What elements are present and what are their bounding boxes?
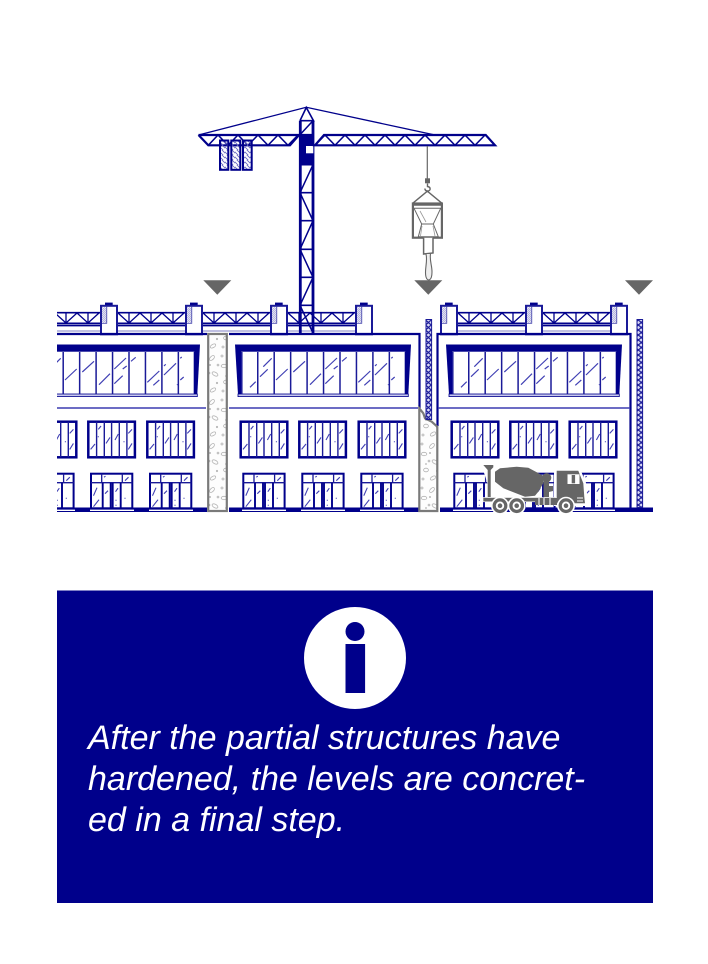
roof piers (101, 303, 627, 334)
arrow: left joint (203, 280, 231, 295)
tower crane (198, 107, 495, 333)
building facade row (24, 303, 653, 512)
mixer chute (483, 465, 493, 497)
hook block (425, 178, 430, 191)
upper band windows (24, 344, 622, 397)
truck chassis (483, 498, 557, 505)
bucket body (413, 204, 442, 238)
wall outlines (57, 334, 630, 508)
truck cab (557, 471, 585, 503)
crane mast (299, 108, 314, 333)
mixer drum (495, 467, 543, 497)
panel: info (57, 590, 653, 903)
ground line (57, 508, 653, 512)
truck wheels (491, 497, 575, 515)
crane jib (315, 135, 495, 145)
crane counter-jib (198, 135, 299, 145)
drum drive (542, 473, 553, 497)
arrow: right joint (625, 280, 653, 295)
info text: ed in a final step. (88, 801, 345, 839)
icon: information (304, 607, 406, 709)
concrete column: being poured (419, 408, 437, 511)
arrow: middle joint (414, 280, 442, 295)
formwork lattice: right joint (637, 320, 643, 508)
floor lines (57, 407, 630, 409)
concrete column: finished (208, 334, 227, 511)
hoist cable (426, 146, 428, 179)
concrete bucket on crane hook (413, 146, 442, 280)
info text: After the partial structures have (86, 719, 560, 757)
threshold highlights (57, 510, 615, 511)
middle row windows (30, 422, 616, 457)
ground floor doors (32, 474, 614, 508)
counterweights (220, 140, 252, 170)
truck white halo (482, 464, 587, 505)
crane tie cables (198, 107, 435, 135)
formwork lattice: middle joint (426, 320, 432, 420)
falling concrete (425, 254, 432, 280)
sling (413, 192, 442, 203)
concrete mixer truck (482, 464, 587, 515)
info text (86, 719, 585, 839)
bucket spout (424, 238, 433, 254)
roof trusses (33, 313, 610, 331)
info text: hardened, the levels are concret- (88, 760, 585, 798)
